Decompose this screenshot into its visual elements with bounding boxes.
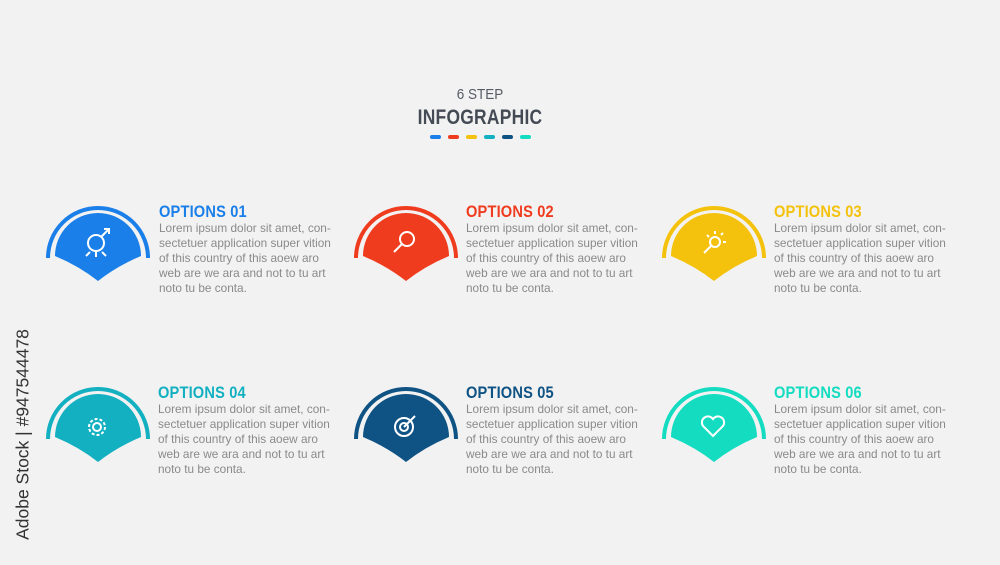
heading: OPTIONS 03 [774, 202, 862, 221]
text block: noto tu be conta. [466, 462, 554, 476]
title: INFOGRAPHIC [418, 106, 542, 129]
icon: fan yellow [662, 206, 766, 281]
panel: option 04 [46, 383, 330, 476]
text block: noto tu be conta. [159, 281, 247, 295]
text block: Lorem ipsum dolor sit amet, con- [466, 402, 638, 416]
text block: sectetuer application super vition [774, 236, 946, 250]
text block: of this country of this aoew aro [159, 251, 319, 265]
text block: sectetuer application super vition [159, 236, 331, 250]
text block: sectetuer application super vition [774, 417, 946, 431]
heading: OPTIONS 05 [466, 383, 554, 402]
heading: OPTIONS 06 [774, 383, 862, 402]
text block: sectetuer application super vition [466, 417, 638, 431]
text block: noto tu be conta. [158, 462, 246, 476]
text block: of this country of this aoew aro [158, 432, 318, 446]
text block: Lorem ipsum dolor sit amet, con- [774, 221, 946, 235]
heading: OPTIONS 04 [158, 383, 246, 402]
text block: web are we ara and not to tu art [774, 266, 941, 280]
text block [774, 221, 946, 295]
panel: option 02 [354, 202, 638, 295]
icon: fan navy [354, 387, 458, 462]
text block: web are we ara and not to tu art [158, 447, 325, 461]
text block: Lorem ipsum dolor sit amet, con- [158, 402, 330, 416]
heading: OPTIONS 02 [466, 202, 554, 221]
text block [159, 221, 331, 295]
text block: of this country of this aoew aro [466, 432, 626, 446]
text block: of this country of this aoew aro [774, 251, 934, 265]
text block: Lorem ipsum dolor sit amet, con- [159, 221, 331, 235]
text block [158, 402, 330, 476]
heading: OPTIONS 01 [159, 202, 247, 221]
text block: noto tu be conta. [466, 281, 554, 295]
text block: of this country of this aoew aro [466, 251, 626, 265]
text block [466, 221, 638, 295]
text block: web are we ara and not to tu art [466, 266, 633, 280]
text block: web are we ara and not to tu art [159, 266, 326, 280]
icon: fan mint [662, 387, 766, 462]
text block: sectetuer application super vition [466, 236, 638, 250]
text block: of this country of this aoew aro [774, 432, 934, 446]
text block: noto tu be conta. [774, 281, 862, 295]
panel: option 05 [354, 383, 638, 476]
text block: Lorem ipsum dolor sit amet, con- [774, 402, 946, 416]
text block: web are we ara and not to tu art [774, 447, 941, 461]
subtitle: 6 STEP [457, 86, 503, 103]
icon: fan red [354, 206, 458, 281]
icon: fan blue [46, 206, 150, 281]
text block [774, 402, 946, 476]
text block [466, 402, 638, 476]
panel: option 01 [46, 202, 331, 295]
panel: option 06 [662, 383, 946, 476]
text block: sectetuer application super vition [158, 417, 330, 431]
icon: fan teal [46, 387, 150, 462]
color dashes [430, 135, 531, 139]
panel: option 03 [662, 202, 946, 295]
text block: noto tu be conta. [774, 462, 862, 476]
text block: Lorem ipsum dolor sit amet, con- [466, 221, 638, 235]
text block: web are we ara and not to tu art [466, 447, 633, 461]
watermark side text: Adobe Stock | #947544478 [12, 329, 32, 540]
